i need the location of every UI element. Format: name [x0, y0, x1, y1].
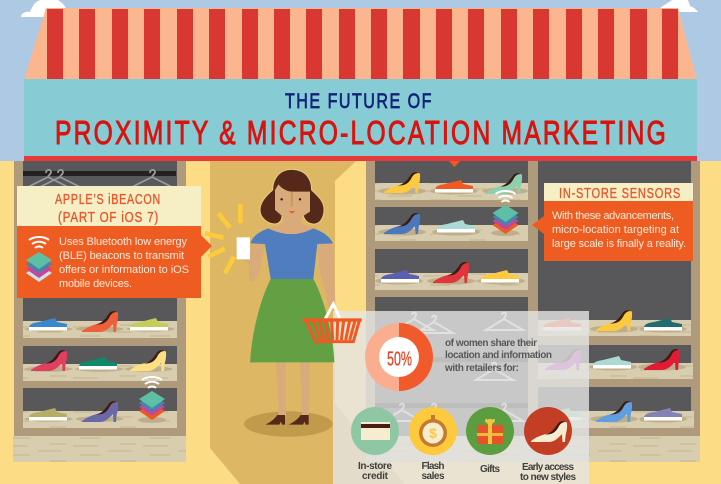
back wall — [210, 161, 405, 484]
callout body text: With these advancements, — [552, 210, 674, 222]
green skirt — [250, 279, 334, 362]
centre and right shelf unit — [366, 161, 700, 462]
donut chart: 50% — [365, 323, 433, 391]
neck and chest — [269, 213, 314, 238]
icon: flash sales: $ — [429, 425, 437, 441]
hair — [260, 169, 324, 224]
callout body text: offers or information to iOS — [59, 264, 189, 276]
icon labels: to new styles — [520, 472, 576, 483]
callout body text — [552, 210, 686, 250]
signal rays — [205, 204, 240, 273]
icon labels: Gifts — [480, 464, 500, 475]
shoes on centre and right shelves — [381, 172, 682, 422]
cloud left — [21, 0, 66, 17]
title line one: THE FUTURE OF — [285, 89, 433, 113]
callout heading: (PART OF iOS 7) — [58, 210, 159, 226]
callout: Apple's iBeacon — [17, 186, 212, 298]
icon: in-store credit — [351, 407, 399, 455]
sky background — [0, 0, 721, 161]
icon labels: Early access — [522, 462, 574, 473]
donut chart: 50%: 50% — [387, 348, 412, 370]
beacon on left shelf — [139, 377, 165, 420]
icon labels: sales — [422, 471, 445, 482]
statistic text: with retailers for: — [444, 363, 519, 374]
callout heading — [55, 192, 161, 226]
icon: early access shoe — [524, 407, 572, 455]
statistic text: location and information — [445, 350, 552, 361]
blue top — [251, 228, 333, 279]
beacon on centre shelf — [492, 191, 518, 234]
callout: in-store sensors — [532, 183, 693, 261]
callout body text: micro-location targeting at — [552, 224, 679, 236]
small orange marker — [449, 161, 460, 167]
callout body text: mobile devices. — [59, 278, 132, 290]
statistic text — [444, 338, 552, 374]
callout heading: APPLE’S iBEACON — [55, 192, 161, 208]
icon labels — [358, 461, 576, 483]
face — [275, 184, 310, 217]
icon: flash sales — [409, 407, 457, 455]
floor shadow — [244, 411, 333, 437]
shoes — [265, 415, 309, 425]
left shelf unit — [13, 161, 186, 462]
hangers seen through panel — [384, 313, 523, 421]
storefront awning — [24, 8, 697, 80]
beacon icon — [26, 237, 52, 282]
callout heading: IN-STORE SENSORS — [559, 186, 681, 202]
callout body text: (BLE) beacons to transmit — [59, 250, 184, 262]
icon labels: credit — [362, 471, 389, 482]
legs — [276, 362, 310, 417]
callout body text: large scale is finally a reality. — [552, 238, 686, 250]
callout body text: Uses Bluetooth low energy — [59, 236, 188, 248]
woman with phone and basket — [205, 169, 362, 437]
cloud right — [660, 0, 698, 12]
icon labels: In-store — [358, 461, 392, 472]
icon: gifts — [466, 407, 514, 455]
callout body text — [59, 236, 189, 290]
statistics panel — [333, 311, 589, 484]
store sign band — [24, 79, 697, 161]
icon labels: Flash — [422, 461, 444, 472]
basket — [302, 304, 362, 342]
arms — [241, 243, 265, 282]
phone — [237, 237, 250, 259]
ground and wall background — [0, 161, 721, 484]
statistic text: of women share their — [445, 338, 537, 349]
shoes on left shelves — [29, 311, 168, 422]
